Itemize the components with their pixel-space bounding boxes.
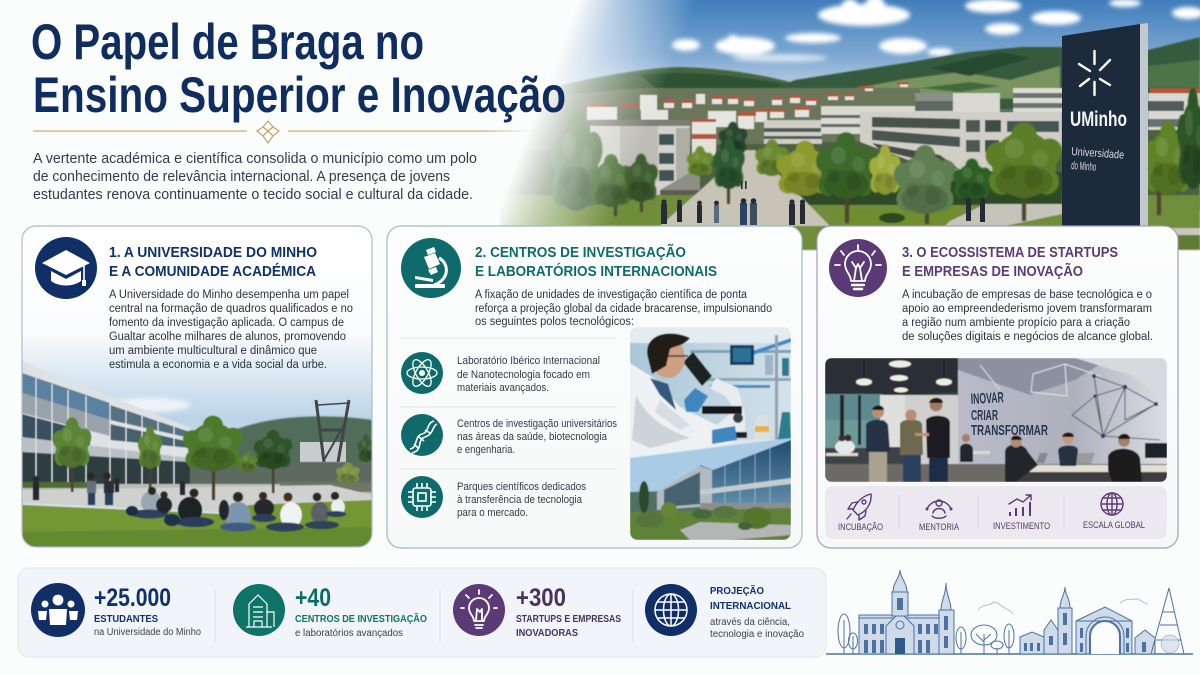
hero photo: Campus de Gualtar (500, 0, 1200, 250)
item: investimento: INVESTIMENTO (993, 521, 1050, 531)
panel body text: apoio ao empreendederismo jovem transformaram (902, 303, 1152, 315)
stat: projeção internacional: tecnologia e inovação (710, 629, 804, 640)
wall lettering (971, 392, 1048, 435)
stat: startups: STARTUPS E EMPRESAS (516, 613, 621, 625)
hills (549, 36, 1200, 110)
panel body text: A Universidade do Minho desempenha um papel (109, 289, 349, 301)
icon: microscope (401, 238, 461, 298)
photo: laboratory and research building (630, 327, 791, 540)
item: mentoria: MENTORIA (919, 522, 959, 532)
panel heading: 1. A UNIVERSIDADE DO MINHO (109, 244, 317, 261)
panel body text: estimula a economia e a vida social da urbe. (109, 359, 327, 371)
middle trees (956, 624, 1014, 654)
left trees (838, 614, 858, 654)
icon: light bulb (829, 239, 887, 297)
item: incubação: INCUBAÇÃO (838, 522, 883, 532)
flasks (754, 415, 770, 440)
panel body text: central na formação de quadros qualificados e no (109, 303, 353, 315)
panel heading: 2. CENTROS DE INVESTIGAÇÃO (475, 243, 686, 261)
item: mentoria (919, 500, 959, 532)
icon: UMinho logo (1079, 51, 1110, 95)
panel: Universidade do Minho (22, 226, 374, 547)
strip: support icons (825, 486, 1167, 539)
list item: biotecnologia: Centros de investigação universitários (457, 418, 617, 430)
item: investimento (993, 495, 1050, 531)
desks and people (826, 453, 858, 456)
microscope (708, 378, 745, 432)
list item: parques científicos: para o mercado. (457, 507, 528, 519)
wall lettering: TRANSFORMAR (971, 422, 1048, 439)
stat: startups: +300 (516, 584, 566, 612)
wall lettering: CRIAR (971, 407, 998, 424)
panel body text: de soluções digitais e negócios de alcance global. (902, 331, 1153, 343)
stat: projeção internacional: através da ciência, (710, 617, 790, 628)
illustration: Braga skyline (826, 570, 1193, 654)
stat: startups (453, 584, 621, 639)
stat: startups: INOVADORAS (516, 627, 578, 639)
second tower (1058, 587, 1072, 654)
panel body text: a região num ambiente propício para a criação (902, 317, 1130, 329)
stat: estudantes: ESTUDANTES (94, 613, 158, 625)
clouds (978, 599, 1148, 614)
panel body text: fomento da investigação aplicada. O campus de (109, 317, 344, 329)
intro text (33, 150, 477, 203)
trees (550, 88, 1200, 224)
stat: centros de investigação (233, 584, 427, 639)
campus buildings (590, 87, 1200, 196)
photo: coworking space (825, 358, 1167, 482)
stat: projeção internacional (645, 584, 804, 640)
panel body text: os seguintes polos tecnológicos: (475, 316, 634, 328)
list item: biotecnologia: nas áreas da saúde, biotecnologia (457, 431, 607, 443)
sky with clouds (500, 0, 1200, 112)
people walking (661, 181, 985, 225)
small houses (1020, 620, 1058, 654)
panel heading (902, 244, 1118, 280)
title: Ensino Superior e Inovação (33, 67, 566, 123)
stat: estudantes: +25.000 (94, 584, 171, 612)
list item: nanotecnologia (401, 352, 600, 394)
church (859, 570, 954, 654)
stat: estudantes (31, 583, 201, 638)
stat: projeção internacional: PROJEÇÃO (710, 584, 764, 597)
panel heading (109, 244, 317, 280)
intro text: estudantes renova continuamente o tecido social e cultural da cidade. (33, 186, 473, 203)
stat: projeção internacional: INTERNACIONAL (710, 600, 792, 612)
panel heading: E A COMUNIDADE ACADÉMICA (109, 263, 316, 280)
campus photo (22, 361, 374, 547)
stats bar (18, 568, 826, 657)
item: escala global: ESCALA GLOBAL (1083, 520, 1145, 530)
list item: nanotecnologia: de Nanotecnologia focado em (457, 369, 590, 381)
panel body text: reforça a projeção global da cidade bracarense, impulsionando (475, 303, 772, 315)
town with red roofs (500, 82, 1200, 210)
item: incubação (838, 494, 883, 532)
sculpture (316, 400, 349, 462)
gold divider with ornament (33, 121, 533, 143)
trees (53, 416, 374, 500)
list item: nanotecnologia: Laboratório Ibérico Internacional (457, 355, 600, 367)
title: O Papel de Braga no (31, 14, 424, 70)
list item: biotecnologia: e engenharia. (457, 444, 515, 456)
wall lettering: INOVAR (970, 389, 1004, 408)
right chapel and spire (1135, 588, 1184, 654)
list item: biotecnologia (401, 414, 617, 456)
title (31, 14, 566, 123)
sign subtitle (1071, 146, 1124, 174)
panel body text: um ambiente multicultural e dinâmico que (109, 345, 317, 357)
list item: parques científicos: à transferência de tecnologia (457, 494, 582, 506)
list item: parques científicos (401, 476, 586, 519)
panel heading: E EMPRESAS DE INOVAÇÃO (902, 262, 1083, 280)
sign subtitle: Universidade (1071, 146, 1124, 162)
panel heading: E LABORATÓRIOS INTERNACIONAIS (475, 262, 717, 280)
intro text: A vertente académica e científica consolida o município como um polo (33, 150, 477, 167)
list item: parques científicos: Parques científicos dedicados (457, 481, 586, 493)
panel body text (475, 289, 772, 328)
panel body text (109, 289, 353, 371)
panel heading: 3. O ECOSSISTEMA DE STARTUPS (902, 244, 1118, 261)
panel body text: Gualtar acolhe milhares de alunos, promovendo (109, 331, 346, 343)
intro text: de conhecimento de relevância internacional. A presença de jovens (33, 168, 450, 185)
arch monument (1076, 607, 1132, 654)
item: escala global (1083, 493, 1145, 530)
UMinho totem sign (1062, 23, 1148, 226)
sign subtitle: do Minho (1071, 160, 1097, 174)
list item: nanotecnologia: materiais avançados. (457, 382, 549, 394)
panel heading (475, 243, 717, 280)
panel body text (902, 289, 1153, 343)
sign name: UMinho (1070, 108, 1127, 131)
scientist (630, 363, 733, 458)
icon: graduation cap (35, 237, 97, 299)
panel: Centros de investigação (387, 226, 802, 548)
stat: estudantes: na Universidade do Minho (94, 627, 201, 638)
stat: centros de investigação: e laboratórios avançados (295, 628, 403, 639)
ground, lawns and paths (500, 150, 1200, 250)
panel body text: A incubação de empresas de base tecnológica e o (902, 289, 1152, 301)
stat: centros de investigação: +40 (295, 584, 331, 612)
panel body text: A fixação de unidades de investigação científica de ponta (475, 289, 748, 301)
students on the lawn (33, 472, 346, 532)
stat: centros de investigação: CENTROS DE INVESTIGAÇÃO (295, 612, 427, 625)
panel: Ecossistema de startups (817, 226, 1178, 548)
